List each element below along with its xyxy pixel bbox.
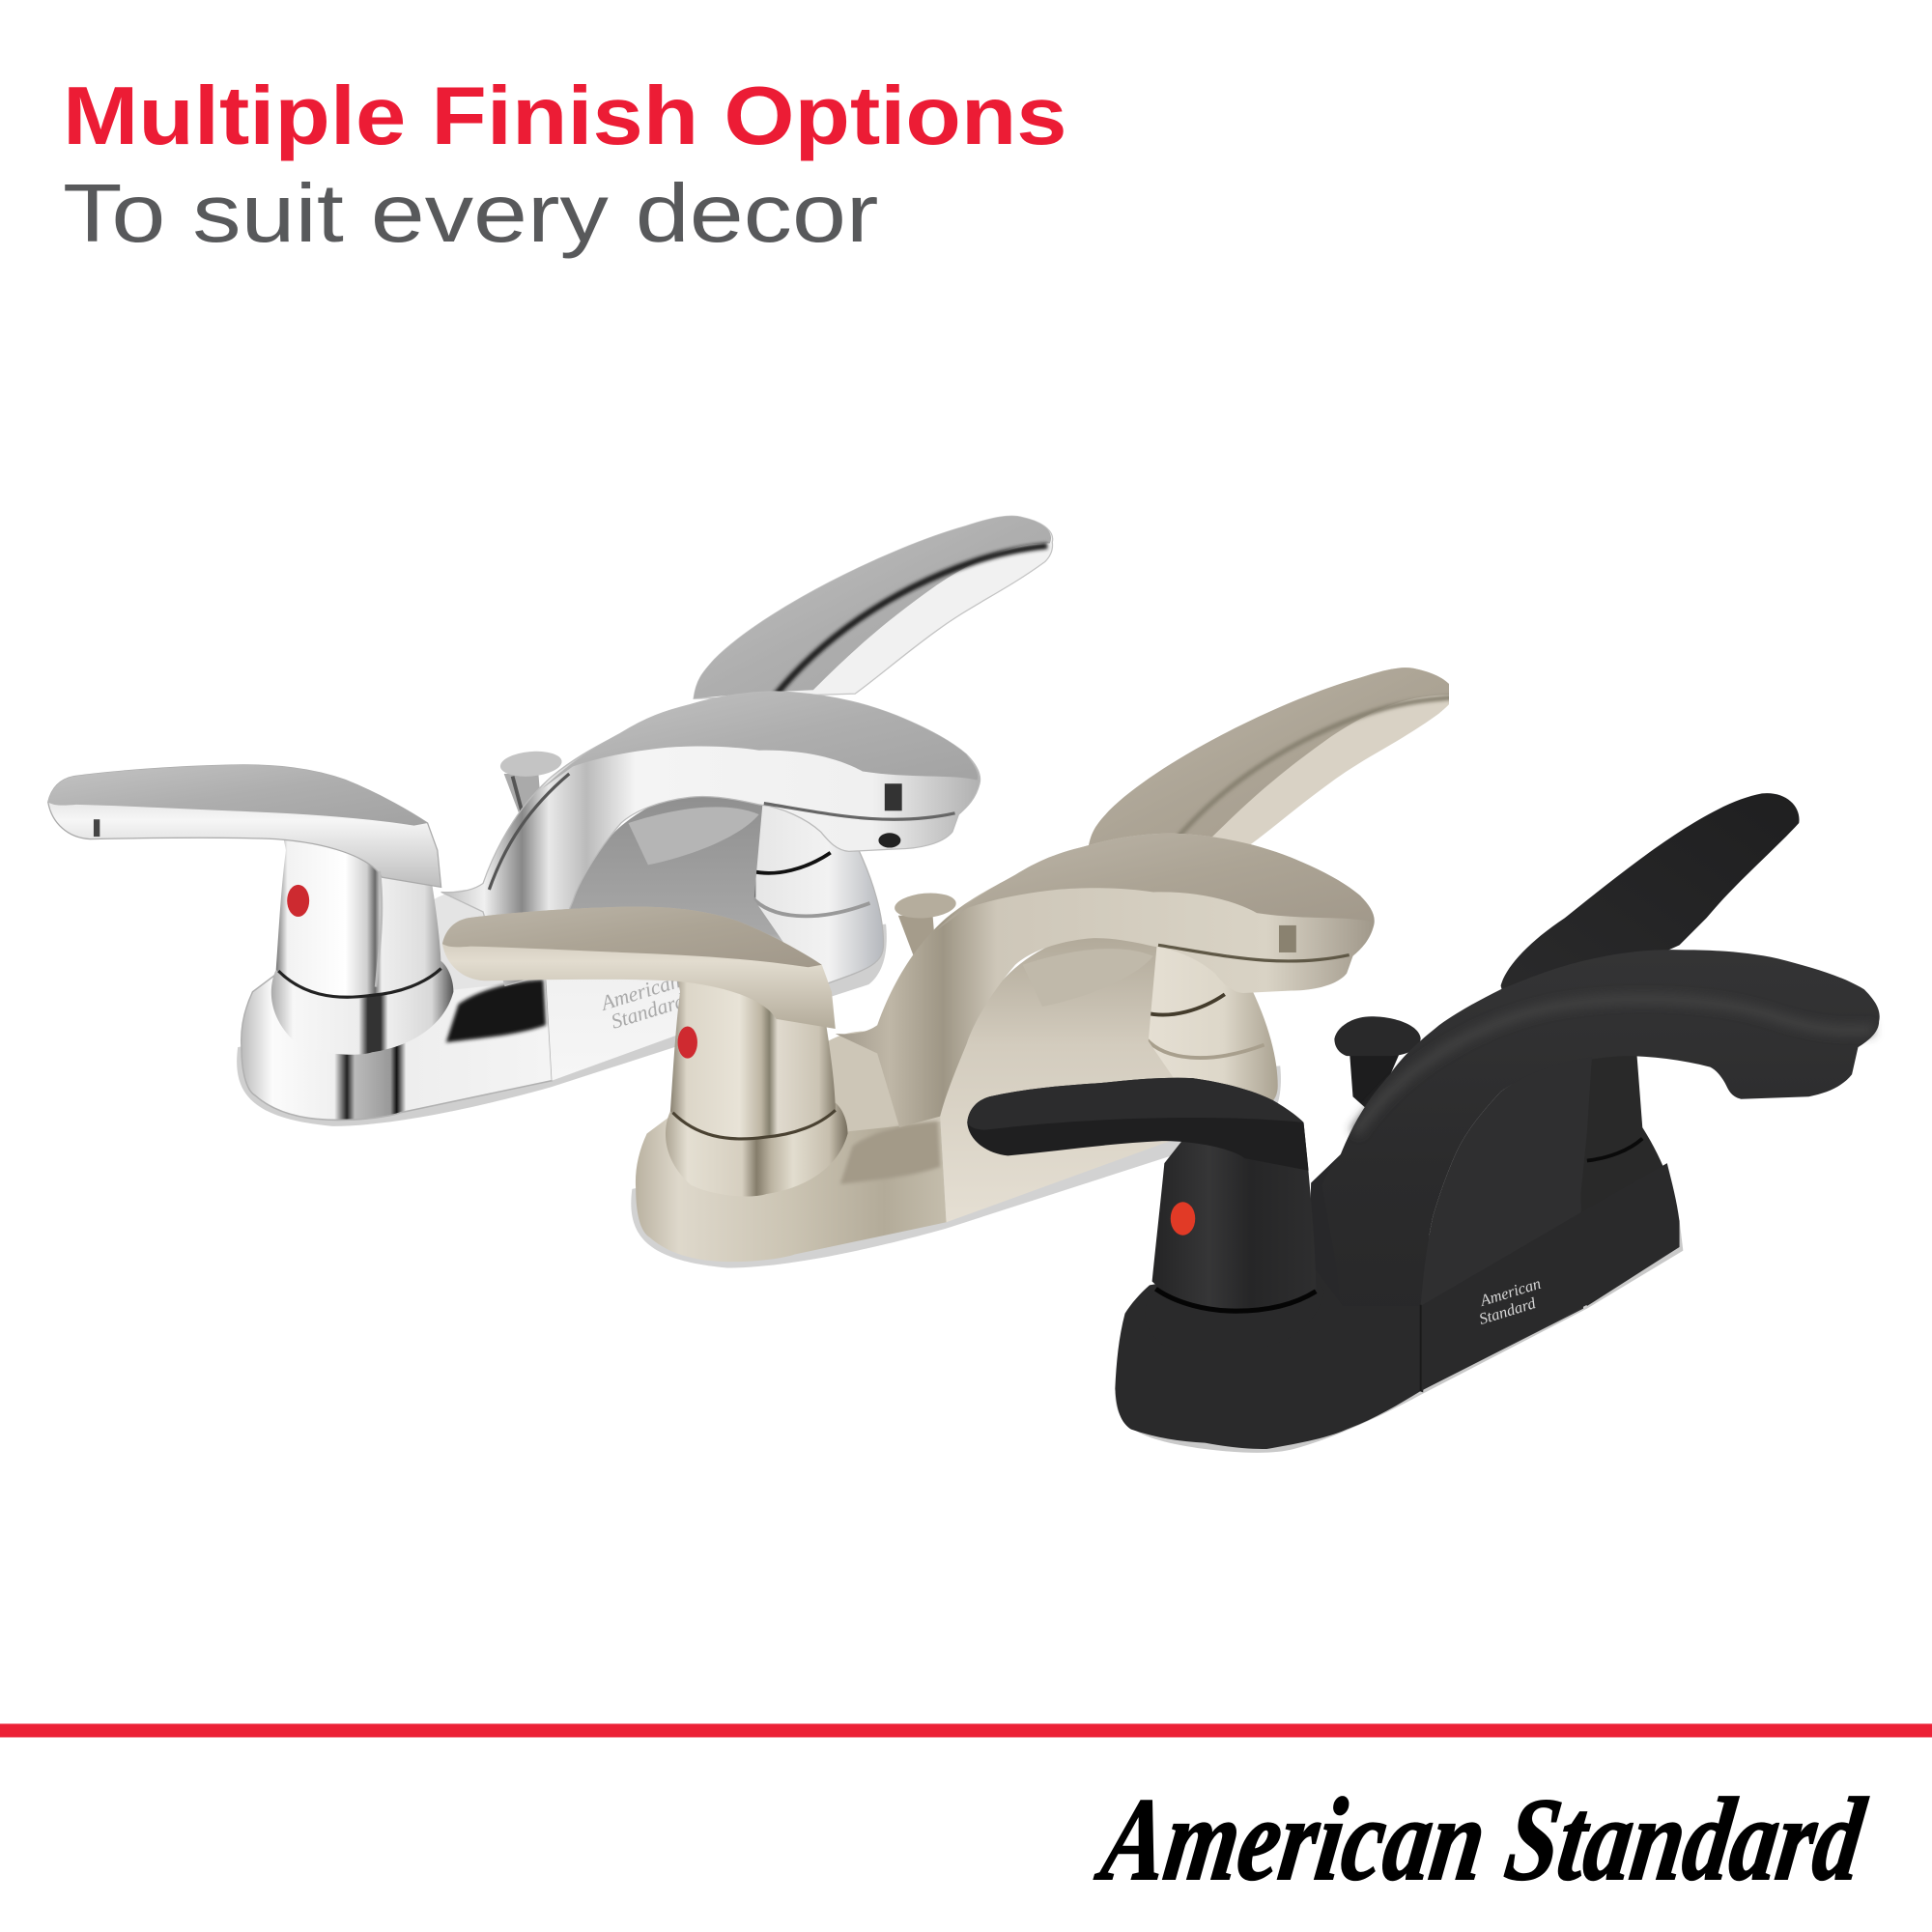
- nickel lever collar: [666, 1103, 848, 1196]
- nickel hot indicator: [678, 1026, 697, 1059]
- chrome panel maker mark: American: [597, 969, 683, 1015]
- nickel collar seam: [672, 1110, 836, 1139]
- chrome lever handle: [48, 765, 441, 987]
- black collar seam: [1155, 1289, 1316, 1311]
- nickel lever handle: [442, 907, 836, 1029]
- black maker mark: [1477, 1274, 1543, 1328]
- nickel lift rod: [895, 893, 956, 954]
- black maker mark: American: [1477, 1274, 1543, 1310]
- nickel neck: [828, 1032, 944, 1133]
- nickel base reflection: [840, 1122, 940, 1184]
- black seam: [1420, 1305, 1422, 1391]
- black lever stem: [1152, 1122, 1316, 1311]
- chrome gasket: [237, 924, 887, 1126]
- chrome base plate: [242, 961, 552, 1120]
- chrome collar seam: [278, 969, 441, 997]
- chrome spout: [441, 692, 980, 985]
- chrome neck: [434, 890, 550, 992]
- chrome panel maker mark: Standard: [609, 989, 688, 1034]
- nickel spout: [836, 834, 1375, 1127]
- nickel lever stem: [670, 965, 836, 1139]
- black lift knob: [1334, 1016, 1421, 1108]
- faucet: matte black: [967, 793, 1880, 1453]
- black neck: [1306, 1152, 1430, 1392]
- chrome back handle: [694, 516, 1053, 698]
- nickel front panel: [941, 938, 1173, 1222]
- chrome back valve and base: [727, 788, 884, 998]
- black back handle: [1501, 793, 1800, 1005]
- chrome lever stem: [276, 823, 441, 997]
- black front panel: [1421, 1057, 1592, 1391]
- black lever collar: [1145, 1274, 1324, 1351]
- chrome lever collar: [271, 961, 453, 1055]
- black spout: [1322, 950, 1880, 1389]
- nickel back valve and base: [1148, 947, 1278, 1100]
- nickel panel reflection: [1036, 949, 1153, 962]
- heading: Multiple Finish Options: Multiple Finish Options: [63, 71, 1067, 162]
- faucet: polished chrome: [48, 516, 1053, 1126]
- divider: red rule: [0, 1723, 1932, 1737]
- black gasket: [1115, 1220, 1683, 1453]
- chrome hot indicator: [287, 885, 309, 917]
- black lever handle: [967, 1078, 1309, 1171]
- chrome panel maker mark: [597, 807, 759, 1034]
- black back valve and base: [1565, 1047, 1680, 1306]
- chrome front panel: [546, 787, 813, 1081]
- faucet: brushed nickel: [442, 668, 1454, 1267]
- black hot indicator: [1171, 1202, 1195, 1236]
- nickel gasket: [631, 1065, 1281, 1267]
- black maker mark: Standard: [1477, 1293, 1539, 1328]
- nickel base plate: [636, 1103, 947, 1262]
- chrome lift rod: [499, 749, 563, 819]
- black base plate: [1115, 1163, 1680, 1449]
- subheading: To suit every decor: To suit every decor: [63, 168, 878, 260]
- chrome base reflection: [446, 980, 546, 1042]
- nickel back handle: [1088, 668, 1454, 850]
